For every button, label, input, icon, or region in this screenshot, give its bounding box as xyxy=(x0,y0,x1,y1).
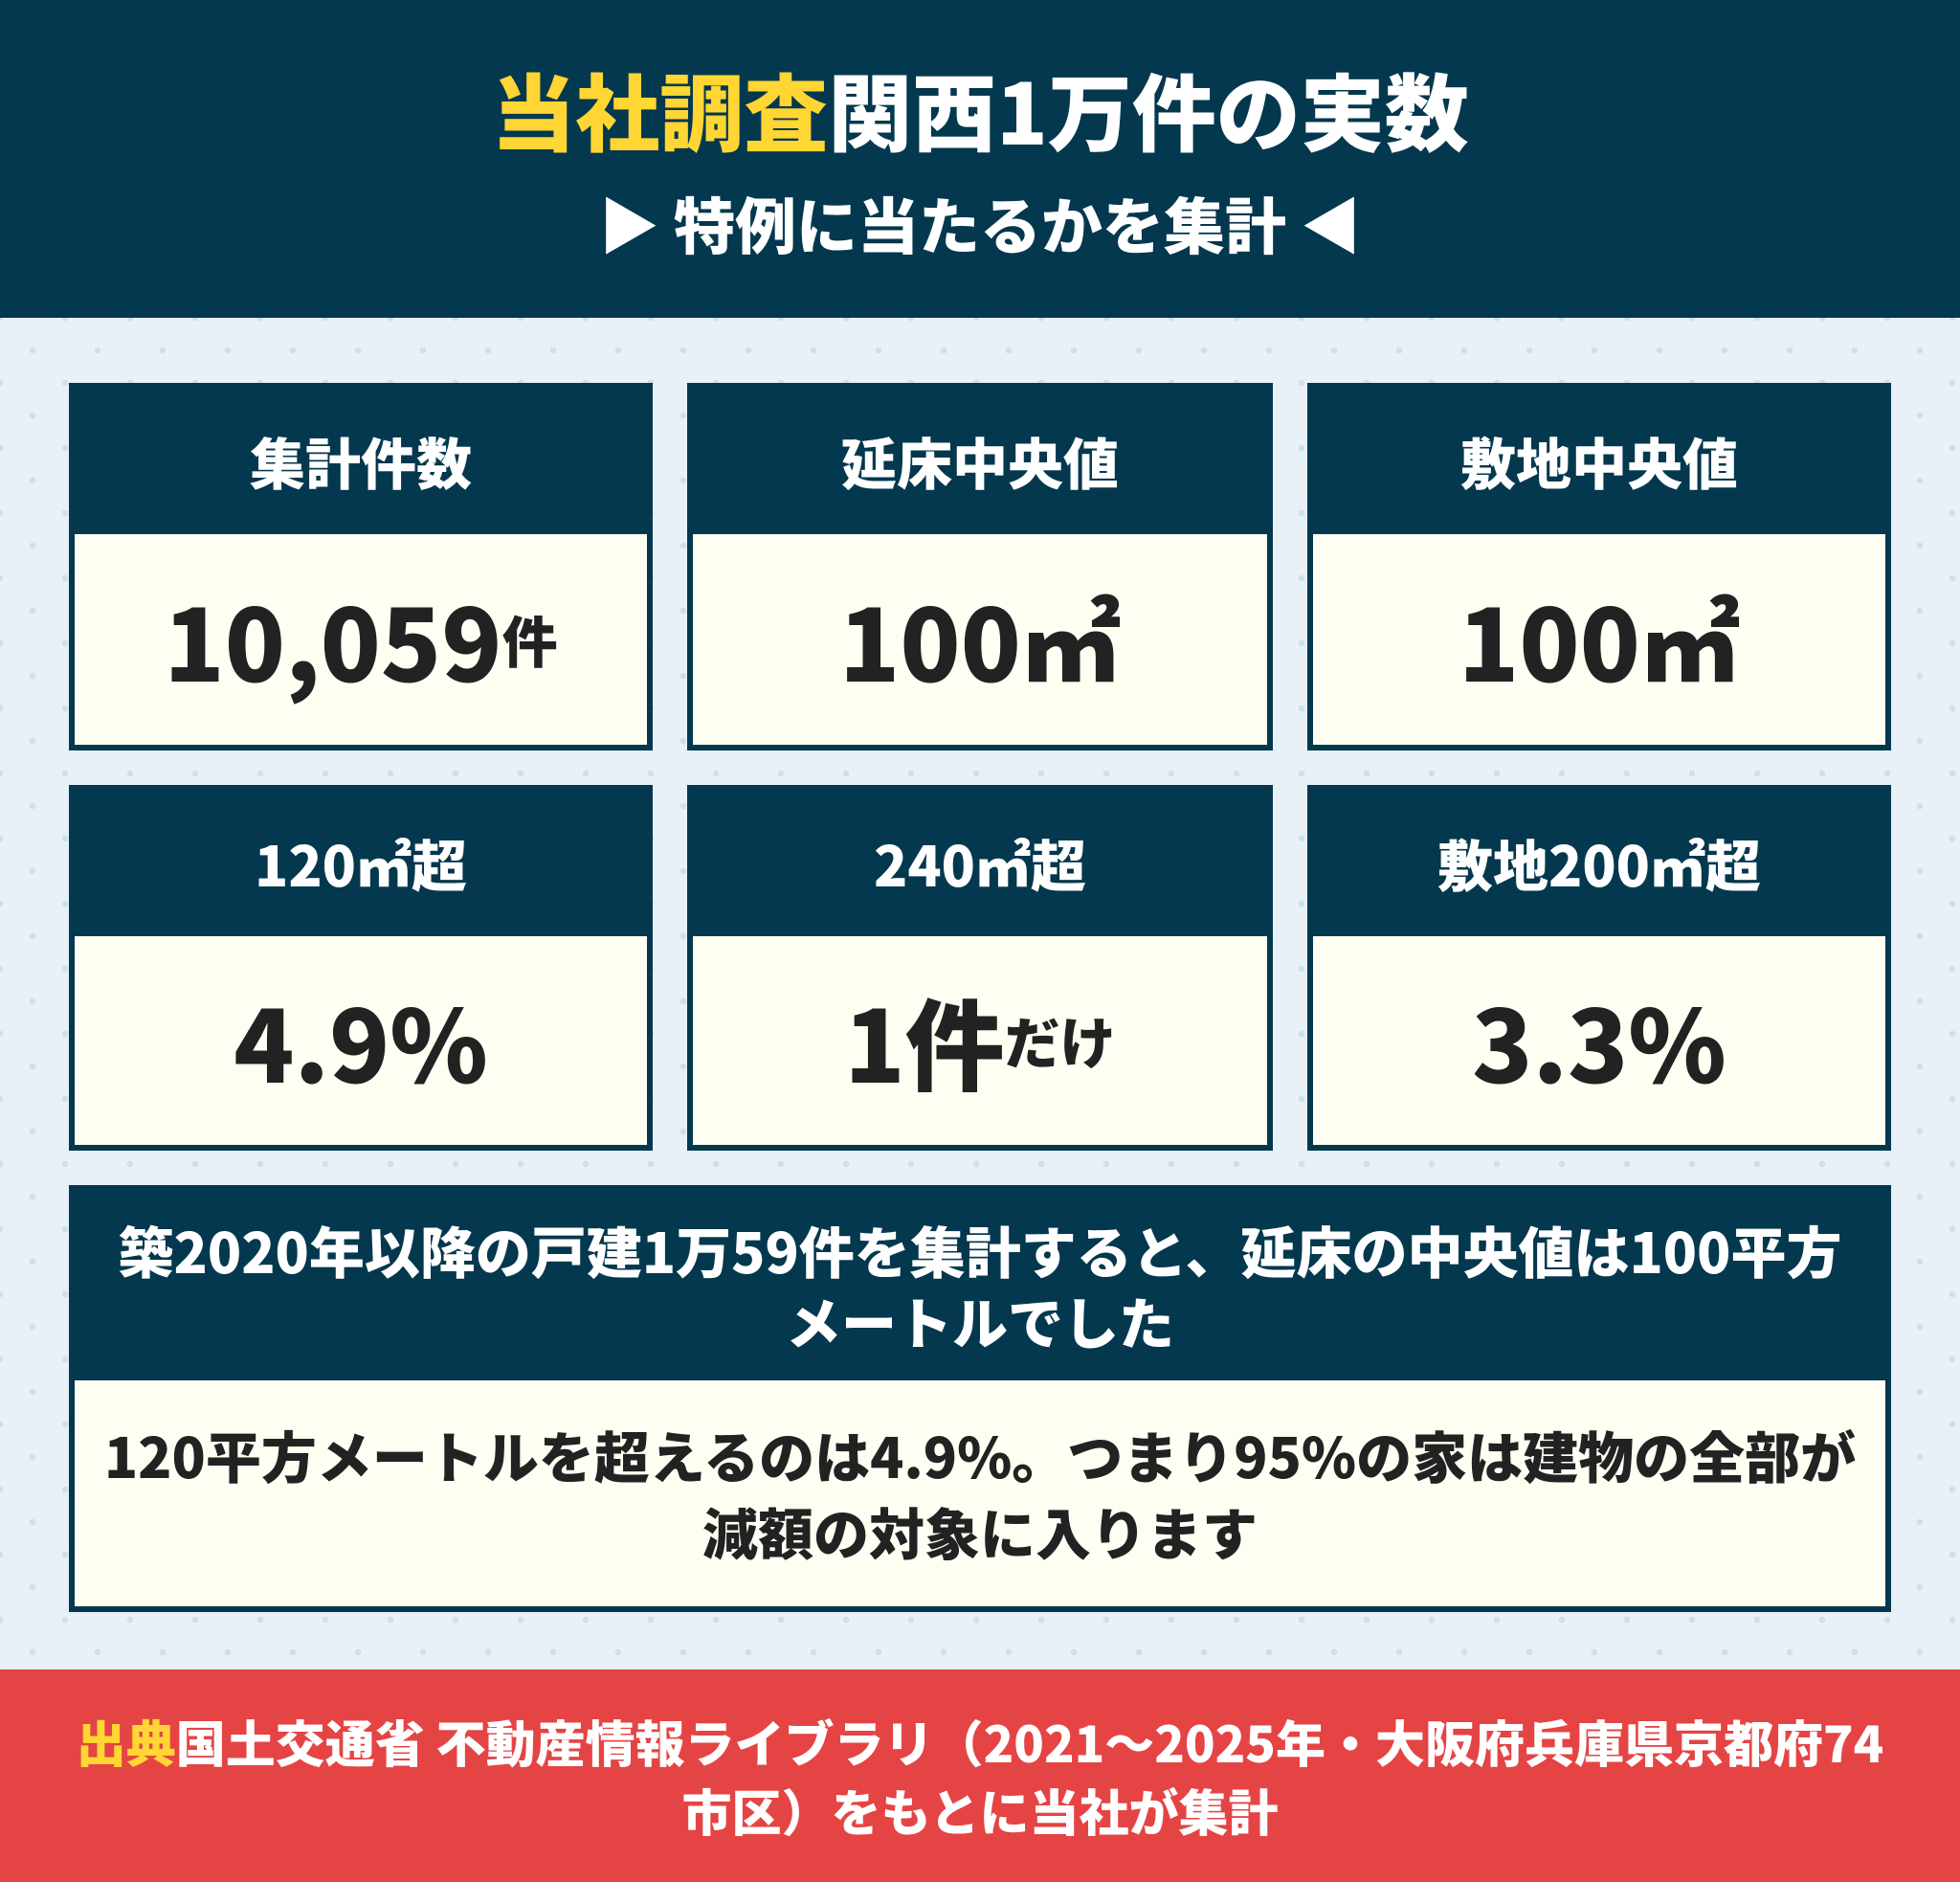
stat card: over 240 sqm xyxy=(687,785,1273,1151)
stat card: site area median xyxy=(1307,383,1891,751)
title: 当社調査関西1万件の実数 xyxy=(491,48,1469,169)
subtitle: ▶ 特例に当たるかを集計 ◀ xyxy=(598,179,1362,267)
card heading: 敷地200㎡超 xyxy=(1437,821,1761,902)
card value: 100㎡ xyxy=(1459,566,1740,710)
source text: 出典国土交通省 不動産情報ライブラリ（2021〜2025年・大阪府兵庫県京都府74市区）をもとに当社が集計 xyxy=(77,1705,1883,1846)
source footer xyxy=(0,1669,1960,1882)
header band xyxy=(0,0,1960,318)
background panel xyxy=(0,318,1960,1669)
stat card: site over 200 sqm xyxy=(1307,785,1891,1151)
card heading: 敷地中央値 xyxy=(1460,419,1738,500)
card value xyxy=(75,534,647,745)
stat card: floor area median xyxy=(687,383,1273,751)
card value: 4.9% xyxy=(234,967,488,1111)
card heading: 120㎡超 xyxy=(255,821,467,902)
summary body: 120平方メートルを超えるのは4.9%。つまり95%の家は建物の全部が減額の対象に入ります xyxy=(104,1414,1856,1571)
card value xyxy=(693,936,1267,1145)
stat card: total count xyxy=(69,383,653,751)
summary body xyxy=(75,1380,1885,1606)
card value xyxy=(693,534,1267,745)
card value: 1件だけ xyxy=(844,967,1116,1111)
summary heading: 築2020年以降の戸建1万59件を集計すると、延床の中央値は100平方メートルでした xyxy=(119,1208,1841,1359)
card value: 3.3% xyxy=(1472,967,1726,1111)
card value: 10,059件 xyxy=(164,566,558,710)
card value xyxy=(1313,936,1885,1145)
card value xyxy=(1313,534,1885,745)
summary panel xyxy=(69,1185,1891,1612)
stat card: over 120 sqm xyxy=(69,785,653,1151)
card heading: 延床中央値 xyxy=(841,419,1119,500)
card heading: 集計件数 xyxy=(250,419,472,500)
card heading: 240㎡超 xyxy=(874,821,1086,902)
card value: 100㎡ xyxy=(839,566,1121,710)
card value xyxy=(75,936,647,1145)
